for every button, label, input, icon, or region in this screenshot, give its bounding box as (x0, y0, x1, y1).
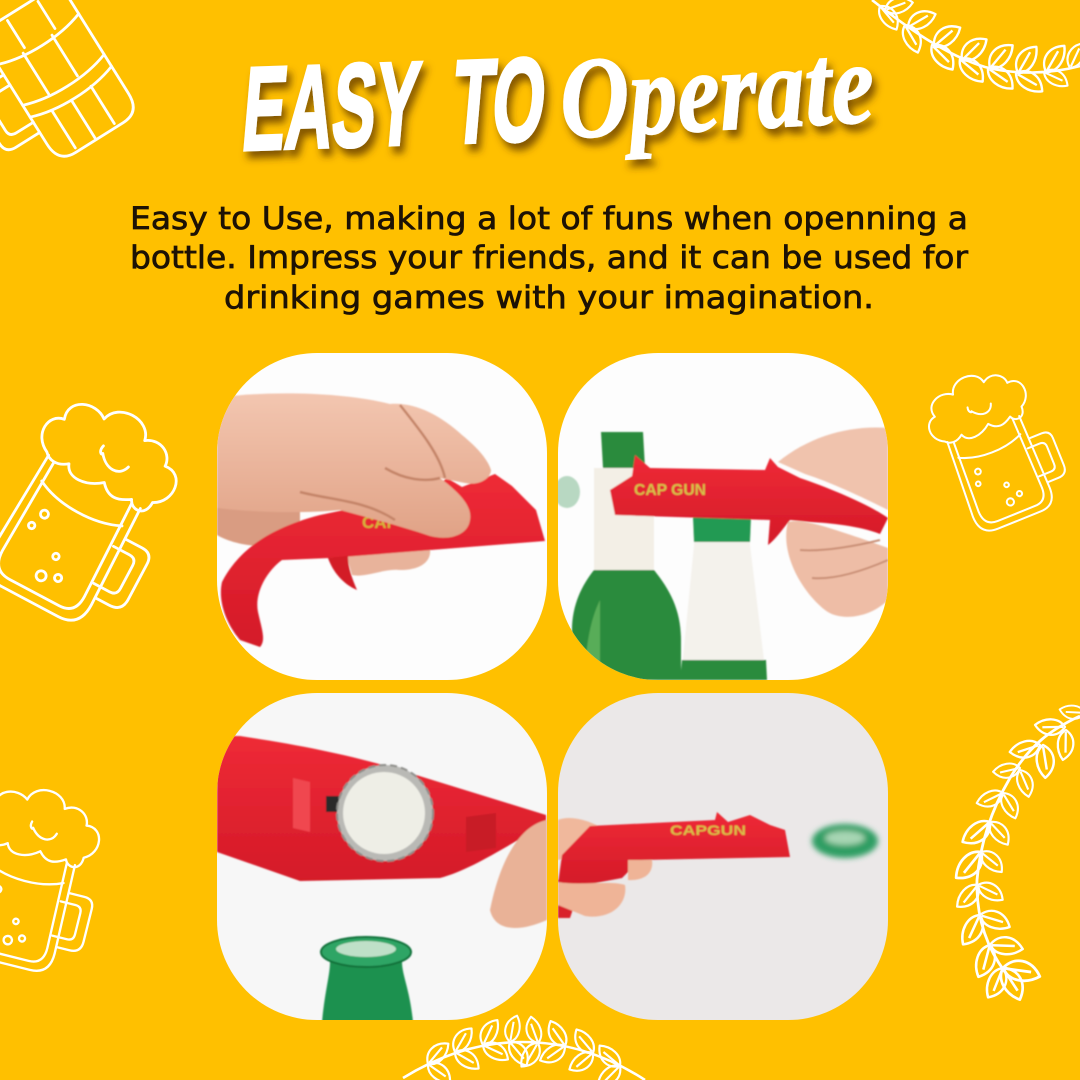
heading (238, 20, 877, 176)
red gun (610, 455, 888, 545)
icon: beer mug left (0, 381, 205, 642)
index finger (628, 860, 652, 880)
icon: laurel branch bottom (403, 1014, 645, 1080)
bottle mouth (336, 941, 396, 957)
description text (130, 201, 968, 316)
line 1: Easy to Use, making a lot of funs when openning a (130, 201, 968, 237)
hand behind trigger (786, 521, 888, 617)
red gun body (217, 736, 546, 881)
icon: beer mug bottom-left (0, 776, 117, 981)
icon: beer mug right (916, 355, 1077, 539)
fingers under gun (345, 548, 430, 576)
bottle rim (321, 937, 411, 967)
hand top (778, 428, 888, 510)
back bottle (572, 432, 681, 680)
gun logo: CAP GUN (634, 482, 706, 499)
thumb behind gun (558, 817, 597, 860)
bottle cap (337, 765, 433, 861)
hand (490, 820, 547, 928)
heading: TO: TO (448, 34, 551, 169)
icon: laurel branch right (950, 704, 1080, 1003)
gun logo: CAP (362, 513, 398, 532)
green bottle (322, 962, 413, 1022)
lower fingers (558, 882, 625, 917)
heading: Operate: Operate (557, 20, 877, 164)
gun logo: CAPGUN (670, 822, 746, 838)
hand (217, 393, 491, 538)
finger creases (300, 405, 445, 520)
panel: hand holding cap gun (217, 353, 547, 680)
blurred cap (554, 476, 580, 508)
gun trigger (328, 556, 357, 590)
heading: EASY TO: EASY (238, 38, 425, 176)
spring teeth (325, 795, 340, 813)
panel: loaded bottle cap (217, 693, 547, 1022)
icon: laurel branch top-right (872, 0, 1080, 97)
panel: cap gun on bottle (554, 353, 888, 680)
line 2: bottle. Impress your friends, and it can be used for (130, 240, 968, 276)
icon: beer mug top-left (0, 0, 152, 184)
red gun (558, 812, 790, 884)
line 3: drinking games with your imagination. (224, 280, 874, 316)
wrist under gun (217, 505, 300, 546)
panel: cap gun firing (558, 693, 888, 1020)
flying bottle cap (812, 824, 878, 858)
gun grip lower (558, 880, 573, 919)
side tab right (466, 813, 496, 852)
cap inner (343, 772, 425, 854)
side tab left (293, 778, 310, 832)
front bottle (680, 517, 767, 680)
finger creases (800, 540, 888, 578)
red gun body (221, 474, 545, 647)
